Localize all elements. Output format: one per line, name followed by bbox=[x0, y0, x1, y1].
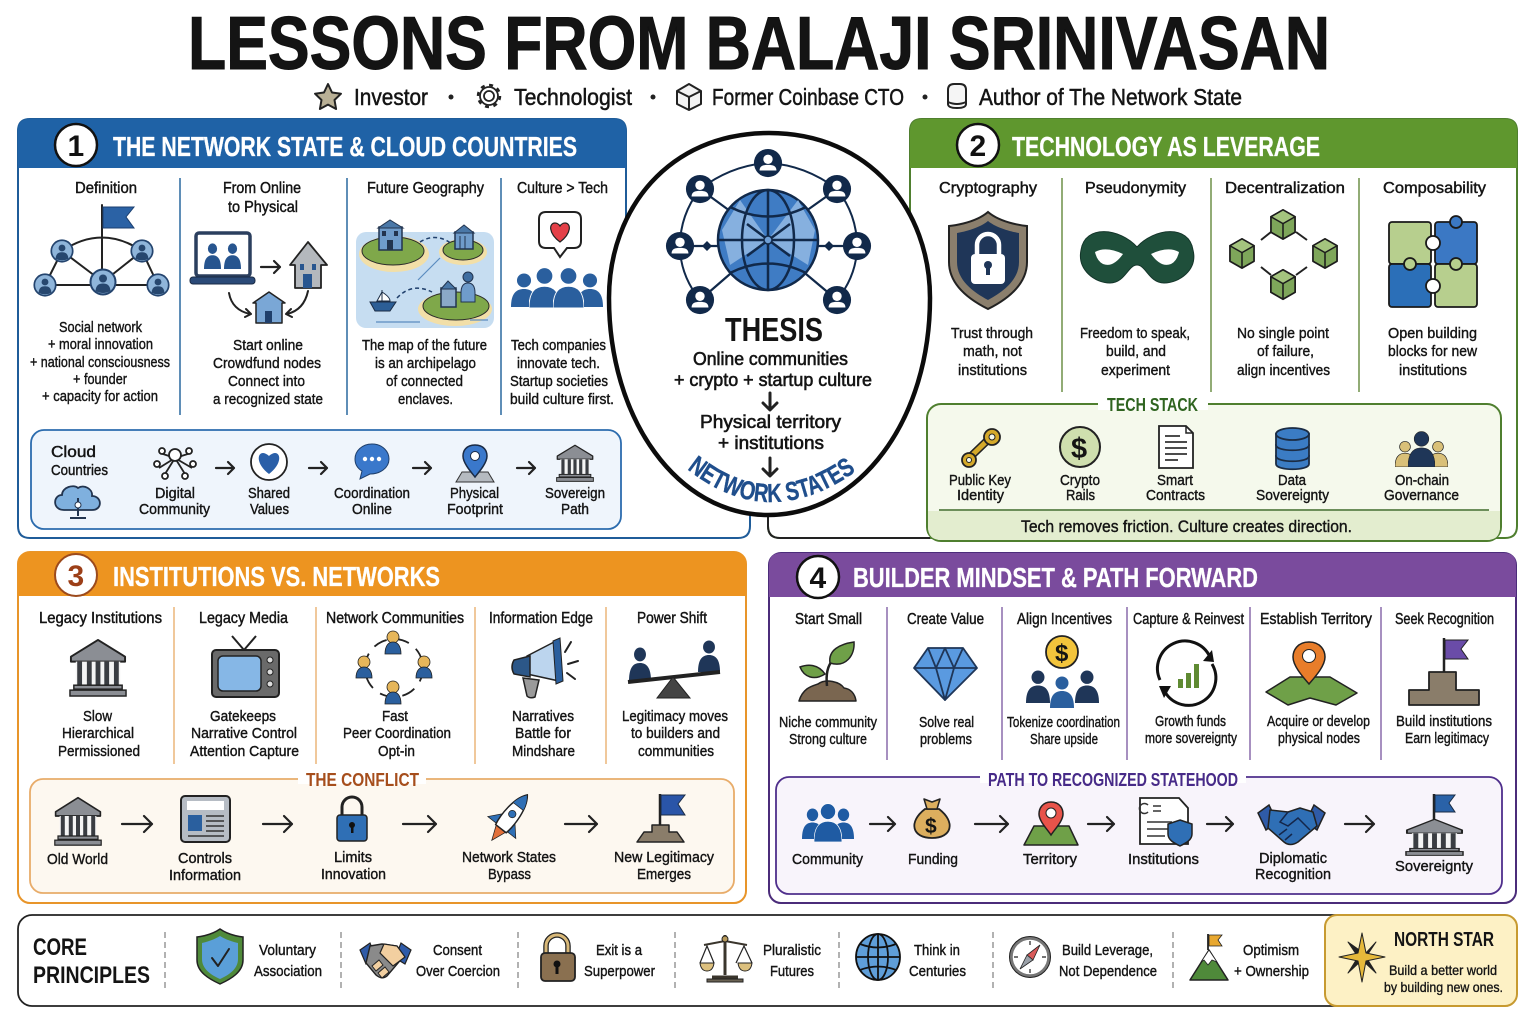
column: legacy institutions: Hierarchical bbox=[62, 725, 134, 742]
column: future geography: Future Geography bbox=[367, 180, 484, 197]
column: pseudonymity: experiment bbox=[1101, 362, 1171, 379]
icon: block cube bbox=[677, 84, 701, 110]
column: composability: Open building bbox=[1388, 325, 1477, 342]
column: network communities: Network Communities bbox=[326, 610, 464, 627]
principle: pluralistic futures bbox=[700, 935, 821, 982]
column: capture and reinvest: Growth funds bbox=[1155, 713, 1226, 730]
column: culture over tech: innovate tech. bbox=[517, 355, 600, 372]
path to recognized statehood flow: PATH TO RECOGNIZED STATEHOOD bbox=[988, 770, 1238, 790]
principle: exit is a superpower bbox=[541, 935, 655, 981]
column: network communities bbox=[326, 610, 464, 760]
step: limits innovation bbox=[321, 797, 386, 883]
step: funding: $ bbox=[925, 815, 937, 838]
north star callout: Build a better world bbox=[1389, 962, 1497, 978]
column: definition: + founder bbox=[73, 371, 127, 388]
column: composability: blocks for new bbox=[1388, 343, 1477, 360]
cloud countries flow: Countries bbox=[51, 462, 108, 479]
column: create value: Create Value bbox=[907, 611, 984, 628]
icon: puzzle pieces bbox=[1389, 216, 1477, 307]
item: on-chain governance: Governance bbox=[1384, 487, 1459, 504]
item: crypto rails: $ bbox=[1071, 433, 1087, 465]
panel 1 header: 1 bbox=[68, 130, 84, 163]
principle: exit is a superpower: Superpower bbox=[584, 963, 655, 980]
column: pseudonymity: Pseudonymity bbox=[1085, 180, 1186, 197]
column: network communities: Fast bbox=[382, 708, 409, 725]
column: cryptography: Cryptography bbox=[939, 180, 1037, 197]
flow: physical footprint: Footprint bbox=[447, 501, 504, 518]
column: create value: Solve real bbox=[919, 714, 974, 731]
column: information edge bbox=[489, 610, 593, 760]
panel 1 header bbox=[18, 119, 626, 168]
column: decentralization: Decentralization bbox=[1225, 180, 1345, 197]
item: smart contracts: Contracts bbox=[1146, 487, 1205, 504]
subtitle roles: Former Coinbase CTO bbox=[712, 84, 904, 110]
core principles heading bbox=[33, 934, 150, 989]
subtitle roles: Author of The Network State bbox=[979, 84, 1242, 110]
subtitle roles bbox=[315, 84, 1242, 110]
column: seek recognition: Earn legitimacy bbox=[1405, 730, 1489, 747]
column: start small: Strong culture bbox=[789, 731, 867, 748]
icon: speech bubble heart over people bbox=[511, 212, 603, 308]
core principles heading: CORE bbox=[33, 934, 87, 961]
column: definition: Social network bbox=[59, 319, 142, 336]
column: future geography bbox=[356, 180, 494, 408]
flow: digital community: Community bbox=[139, 501, 210, 518]
step: new legitimacy emerges bbox=[614, 794, 714, 883]
principle: voluntary association bbox=[197, 929, 322, 984]
icon: north star bbox=[1339, 933, 1385, 982]
column: future geography: The map of the future bbox=[362, 337, 487, 354]
flow: coordination online bbox=[334, 444, 410, 518]
item: public key identity: Public Key bbox=[949, 472, 1011, 489]
thesis text bbox=[674, 349, 872, 476]
column: culture over tech: Culture > Tech bbox=[517, 180, 608, 197]
icon: mask bbox=[1080, 232, 1194, 283]
panel 4: builder mindset and path forward bbox=[769, 553, 1516, 903]
panel 2 header bbox=[910, 119, 1517, 168]
column: seek recognition: Seek Recognition bbox=[1395, 611, 1494, 628]
principle: consent over coercion: Consent bbox=[433, 942, 483, 959]
step: old world: Old World bbox=[47, 851, 108, 868]
icon: book bbox=[948, 84, 966, 108]
thesis text: Physical territory bbox=[700, 412, 841, 432]
column: from online to physical: to Physical bbox=[228, 199, 298, 216]
item: on-chain governance bbox=[1384, 432, 1459, 504]
step: network states bypass: Bypass bbox=[488, 866, 531, 883]
column: start small bbox=[779, 611, 877, 748]
item: smart contracts bbox=[1146, 426, 1205, 504]
principle: voluntary association: Association bbox=[254, 963, 322, 980]
principle: think in centuries bbox=[856, 934, 966, 980]
step: network states bypass bbox=[462, 784, 556, 883]
cloud countries flow bbox=[31, 430, 621, 529]
tech stack box bbox=[927, 395, 1501, 541]
icon: globe network bbox=[666, 149, 871, 314]
icon: star bbox=[315, 84, 341, 109]
column: capture and reinvest: Capture & Reinvest bbox=[1133, 611, 1244, 628]
thesis text: Online communities bbox=[693, 349, 848, 369]
column: decentralization bbox=[1225, 180, 1345, 379]
thesis text: + institutions bbox=[718, 433, 824, 453]
step: territory: Territory bbox=[1023, 851, 1077, 868]
item: data sovereignty bbox=[1256, 428, 1329, 504]
panel 3 header bbox=[18, 552, 746, 596]
column: cryptography bbox=[939, 180, 1037, 379]
step: territory bbox=[1023, 802, 1078, 868]
column: information edge: Battle for bbox=[515, 725, 571, 742]
flow: shared values: Shared bbox=[248, 485, 290, 502]
flow: shared values: Values bbox=[250, 501, 289, 518]
column: definition bbox=[30, 180, 170, 405]
panel 1 header: THE NETWORK STATE & CLOUD COUNTRIES bbox=[113, 131, 577, 162]
column: network communities: Opt-in bbox=[378, 743, 415, 760]
column: legacy media: Legacy Media bbox=[199, 610, 288, 627]
subtitle roles: Investor bbox=[354, 84, 428, 110]
step: controls information: Information bbox=[169, 867, 241, 884]
column: composability bbox=[1383, 180, 1486, 379]
column: from online to physical: a recognized state bbox=[213, 391, 323, 408]
principle: optimism and ownership: Optimism bbox=[1243, 942, 1299, 959]
step: institutions: Institutions bbox=[1128, 851, 1199, 868]
icon: peer ring bbox=[356, 631, 432, 704]
path to recognized statehood flow bbox=[776, 770, 1502, 894]
step: institutions bbox=[1128, 798, 1199, 868]
column: power shift: communities bbox=[638, 743, 714, 760]
core principles heading: PRINCIPLES bbox=[33, 962, 150, 989]
column: align incentives bbox=[1007, 611, 1120, 748]
step: controls information bbox=[169, 796, 241, 884]
column: information edge: Mindshare bbox=[512, 743, 575, 760]
thesis heading: THESIS bbox=[725, 311, 823, 348]
step: funding: Funding bbox=[908, 851, 958, 868]
step: funding bbox=[908, 799, 958, 868]
column: from online to physical: Start online bbox=[233, 337, 303, 354]
step: diplomatic recognition: Recognition bbox=[1255, 866, 1331, 883]
step: network states bypass: Network States bbox=[462, 849, 556, 866]
flow: sovereign path bbox=[545, 445, 605, 518]
tech stack box: Tech removes friction. Culture creates direction. bbox=[1021, 517, 1352, 536]
panel 4 header bbox=[769, 553, 1516, 598]
panel 2: technology as leverage bbox=[768, 119, 1517, 541]
column: culture over tech: build culture first. bbox=[510, 391, 614, 408]
column: cryptography: math, not bbox=[963, 343, 1023, 360]
column: legacy media bbox=[190, 610, 299, 760]
panel 2 header: 2 bbox=[970, 130, 986, 163]
flow: shared values bbox=[248, 444, 290, 518]
column: culture over tech: Startup societies bbox=[510, 373, 608, 390]
principle: optimism and ownership: + Ownership bbox=[1234, 963, 1309, 980]
item: smart contracts: Smart bbox=[1157, 472, 1194, 489]
north star callout bbox=[1325, 915, 1517, 1006]
column: definition: + national consciousness bbox=[30, 354, 170, 371]
column: composability: institutions bbox=[1399, 362, 1467, 379]
column: legacy media: Narrative Control bbox=[191, 725, 297, 742]
step: community bbox=[792, 804, 863, 868]
principle: pluralistic futures: Futures bbox=[770, 963, 814, 980]
column: information edge: Information Edge bbox=[489, 610, 593, 627]
column: from online to physical: Connect into bbox=[228, 373, 305, 390]
item: crypto rails: Rails bbox=[1066, 487, 1095, 504]
panel: core principles bbox=[18, 915, 1348, 1006]
icon: growth cycle bbox=[1157, 641, 1216, 705]
icon: connected cubes bbox=[1230, 210, 1337, 299]
column: power shift bbox=[622, 610, 728, 760]
principle: optimism and ownership bbox=[1190, 934, 1309, 980]
panel 3: institutions vs networks bbox=[18, 552, 746, 903]
column: definition: + capacity for action bbox=[42, 388, 158, 405]
tech stack box: TECH STACK bbox=[1107, 395, 1198, 415]
column: future geography: of connected bbox=[386, 373, 463, 390]
icon: flag on podium bbox=[1409, 638, 1479, 705]
panel 3 header: INSTITUTIONS VS. NETWORKS bbox=[113, 561, 440, 592]
principle: build leverage bbox=[1010, 936, 1157, 980]
column: future geography: is an archipelago bbox=[375, 355, 476, 372]
icon: television bbox=[212, 636, 279, 697]
column: establish territory: physical nodes bbox=[1278, 730, 1360, 747]
icon: temple bbox=[70, 640, 126, 696]
flow: physical footprint bbox=[447, 445, 504, 518]
item: data sovereignty: Sovereignty bbox=[1256, 487, 1329, 504]
column: legacy institutions: Legacy Institutions bbox=[39, 610, 162, 627]
step: diplomatic recognition: Diplomatic bbox=[1259, 850, 1327, 867]
principle: think in centuries: Think in bbox=[914, 942, 960, 959]
thesis text: + crypto + startup culture bbox=[674, 370, 872, 390]
step: community: Community bbox=[792, 851, 863, 868]
column: pseudonymity: Freedom to speak, bbox=[1080, 325, 1190, 342]
column: start small: Niche community bbox=[779, 714, 877, 731]
icon: seesaw bbox=[628, 640, 720, 698]
column: create value bbox=[907, 611, 984, 748]
step: controls information: Controls bbox=[178, 850, 232, 867]
column: cryptography: Trust through bbox=[951, 325, 1033, 342]
principle: build leverage: Not Dependence bbox=[1059, 963, 1157, 980]
title: LESSONS FROM BALAJI SRINIVASAN bbox=[188, 1, 1330, 85]
column: establish territory: Establish Territory bbox=[1260, 611, 1372, 628]
column: culture over tech bbox=[510, 180, 614, 408]
step: diplomatic recognition bbox=[1255, 805, 1331, 883]
column: from online to physical bbox=[190, 180, 327, 408]
icon: pin on land bbox=[1266, 642, 1357, 705]
panel 1: the network state and cloud countries bbox=[18, 119, 750, 538]
subtitle roles: Technologist bbox=[514, 84, 633, 110]
principle: voluntary association: Voluntary bbox=[259, 942, 316, 959]
column: start small: Start Small bbox=[795, 611, 862, 628]
column: legacy institutions bbox=[39, 610, 162, 760]
column: power shift: Power Shift bbox=[637, 610, 707, 627]
column: power shift: Legitimacy moves bbox=[622, 708, 728, 725]
panel 2 header: TECHNOLOGY AS LEVERAGE bbox=[1012, 131, 1320, 162]
step: new legitimacy emerges: New Legitimacy bbox=[614, 849, 714, 866]
item: crypto rails bbox=[1060, 427, 1100, 504]
principle: build leverage: Build Leverage, bbox=[1062, 942, 1153, 959]
column: decentralization: No single point bbox=[1237, 325, 1330, 342]
north star callout: NORTH STAR bbox=[1394, 929, 1494, 951]
principle: consent over coercion: Over Coercion bbox=[416, 963, 500, 980]
network states curved label: NETWORK STATES bbox=[688, 455, 854, 502]
principle: consent over coercion bbox=[360, 942, 500, 980]
the conflict flow bbox=[30, 769, 734, 893]
column: information edge: Narratives bbox=[512, 708, 574, 725]
flow: physical footprint: Physical bbox=[450, 485, 499, 502]
flow: sovereign path: Sovereign bbox=[545, 485, 605, 502]
column: establish territory: Acquire or develop bbox=[1267, 713, 1370, 730]
column: capture and reinvest bbox=[1133, 611, 1244, 747]
column: align incentives: Tokenize coordination bbox=[1007, 714, 1120, 731]
column: legacy institutions: Permissioned bbox=[58, 743, 140, 760]
flow: coordination online: Online bbox=[352, 501, 392, 518]
column: decentralization: of failure, bbox=[1257, 343, 1314, 360]
icon: megaphone bbox=[512, 638, 578, 698]
column: culture over tech: Tech companies bbox=[511, 337, 606, 354]
north star callout: by building new ones. bbox=[1384, 979, 1503, 995]
column: align incentives: Share upside bbox=[1030, 731, 1098, 748]
icon: cloud bbox=[55, 486, 100, 518]
column: seek recognition bbox=[1395, 611, 1494, 747]
item: crypto rails: Crypto bbox=[1060, 472, 1100, 489]
cloud countries flow: Cloud bbox=[51, 444, 96, 461]
column: pseudonymity: build, and bbox=[1106, 343, 1166, 360]
column: align incentives: Align Incentives bbox=[1017, 611, 1112, 628]
column: composability: Composability bbox=[1383, 180, 1486, 197]
icon: sprout bbox=[799, 642, 856, 701]
thesis oval bbox=[606, 130, 932, 518]
icon: shield with lock bbox=[949, 212, 1027, 309]
column: power shift: to builders and bbox=[631, 725, 720, 742]
flow: sovereign path: Path bbox=[561, 501, 589, 518]
flow: digital community bbox=[139, 448, 210, 518]
column: establish territory bbox=[1260, 611, 1372, 747]
icon: coin above people: $ bbox=[1055, 640, 1069, 667]
icon: diamond bbox=[914, 648, 977, 700]
column: cryptography: institutions bbox=[958, 362, 1027, 379]
column: legacy media: Gatekeeps bbox=[210, 708, 276, 725]
column: from online to physical: Crowdfund nodes bbox=[213, 355, 321, 372]
icon: archipelago map bbox=[356, 220, 494, 328]
step: new legitimacy emerges: Emerges bbox=[637, 866, 691, 883]
column: from online to physical: From Online bbox=[223, 180, 301, 197]
item: data sovereignty: Data bbox=[1278, 472, 1307, 489]
step: old world bbox=[47, 798, 108, 868]
panel 3 header: 3 bbox=[68, 560, 84, 593]
item: public key identity: Identity bbox=[957, 487, 1004, 504]
flow: digital community: Digital bbox=[155, 485, 195, 502]
panel 4 header: BUILDER MINDSET & PATH FORWARD bbox=[853, 562, 1258, 593]
column: create value: problems bbox=[920, 731, 972, 748]
item: public key identity bbox=[949, 429, 1011, 504]
item: on-chain governance: On-chain bbox=[1395, 472, 1449, 489]
icon: gear bbox=[478, 85, 500, 107]
column: seek recognition: Build institutions bbox=[1396, 713, 1492, 730]
step: limits innovation: Limits bbox=[334, 849, 372, 866]
flow: coordination online: Coordination bbox=[334, 485, 410, 502]
column: definition: Definition bbox=[75, 180, 137, 197]
principle: think in centuries: Centuries bbox=[909, 963, 966, 980]
icon: laptop to buildings bbox=[190, 233, 327, 323]
column: definition: + moral innovation bbox=[48, 336, 153, 353]
column: legacy institutions: Slow bbox=[83, 708, 112, 725]
column: decentralization: align incentives bbox=[1237, 362, 1330, 379]
column: future geography: enclaves. bbox=[398, 391, 453, 408]
step: sovereignty bbox=[1395, 794, 1473, 875]
the conflict flow: THE CONFLICT bbox=[306, 769, 420, 790]
column: pseudonymity bbox=[1080, 180, 1194, 379]
column: legacy media: Attention Capture bbox=[190, 743, 299, 760]
step: sovereignty: Sovereignty bbox=[1395, 858, 1473, 875]
icon: flag network bbox=[34, 205, 169, 296]
panel 4 header: 4 bbox=[810, 562, 826, 595]
principle: pluralistic futures: Pluralistic bbox=[763, 942, 821, 959]
step: limits innovation: Innovation bbox=[321, 866, 386, 883]
principle: exit is a superpower: Exit is a bbox=[596, 942, 643, 959]
column: network communities: Peer Coordination bbox=[343, 725, 451, 742]
column: capture and reinvest: more sovereignty bbox=[1145, 730, 1237, 747]
